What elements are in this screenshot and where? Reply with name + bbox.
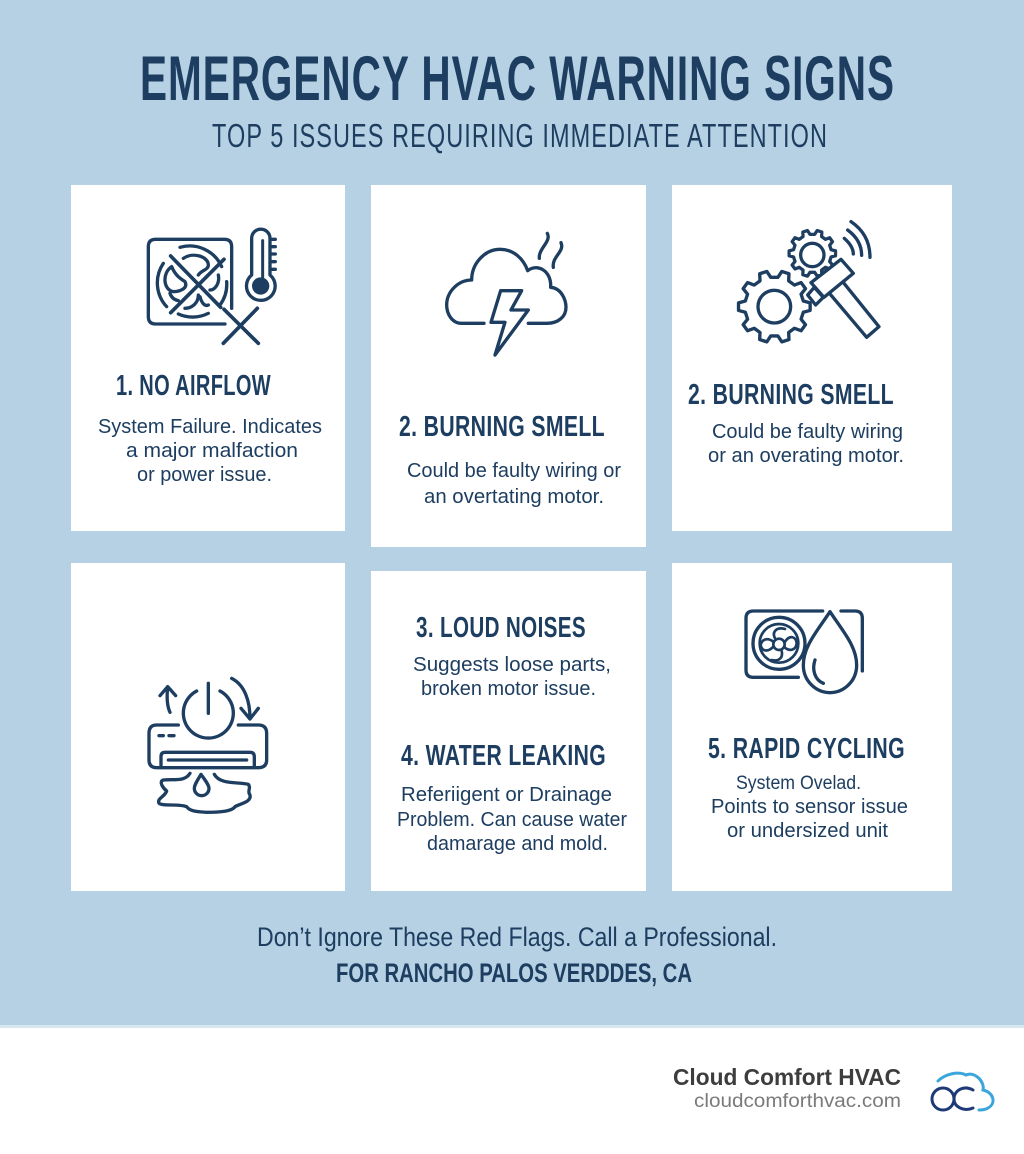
heading: 2. BURNING SMELL [399, 411, 605, 443]
panel: loud noises and water leaking [371, 571, 646, 891]
body text: an overtating motor. [424, 486, 604, 508]
body text: Points to sensor issue [711, 796, 908, 818]
body text: broken motor issue. [421, 678, 596, 700]
body text [711, 773, 908, 842]
icon: leaking air conditioner with power symbol [149, 678, 267, 812]
body text [708, 421, 904, 467]
location line: FOR RANCHO PALOS VERDDES, CA [336, 958, 692, 988]
body text [407, 460, 621, 508]
panel: power and leak icon [71, 563, 345, 891]
body text [98, 416, 322, 486]
body text: Could be faulty wiring or [407, 460, 621, 482]
body text: or undersized unit [727, 820, 888, 842]
panel: rapid cycling [672, 563, 952, 891]
body text [397, 784, 627, 855]
body text: System Failure. Indicates [98, 416, 322, 438]
body text: damarage and mold. [427, 833, 608, 855]
panel: burning smell center [371, 185, 646, 547]
panel: burning smell right [672, 185, 952, 531]
body text [413, 654, 611, 700]
logo [932, 1073, 993, 1110]
body text: Referiigent or Drainage [401, 784, 612, 806]
heading: 5. RAPID CYCLING [708, 733, 905, 765]
call to action: Don’t Ignore These Red Flags. Call a Professional. [257, 922, 777, 952]
body text: Could be faulty wiring [712, 421, 903, 443]
body text: Suggests loose parts, [413, 654, 611, 676]
heading: 2. BURNING SMELL [688, 379, 894, 411]
footer band [0, 1025, 1024, 1154]
website: cloudcomforthvac.com [694, 1091, 901, 1112]
heading: 1. NO AIRFLOW [116, 370, 271, 402]
body text: a major malfaction [126, 440, 298, 462]
body text: System Ovelad. [736, 773, 861, 794]
icon: blocked fan and thermometer [148, 229, 275, 343]
icon: cloud with lightning [447, 233, 566, 355]
heading: 4. WATER LEAKING [401, 740, 606, 772]
brand name: Cloud Comfort HVAC [673, 1064, 901, 1090]
panel: no airflow [71, 185, 345, 531]
heading: 3. LOUD NOISES [416, 612, 586, 644]
body text: Problem. Can cause water [397, 809, 627, 831]
icon: outdoor fan unit and water drop [746, 611, 862, 693]
body text: or an overating motor. [708, 445, 904, 467]
body text: or power issue. [137, 464, 272, 486]
icon: gears and hammer [739, 222, 879, 342]
